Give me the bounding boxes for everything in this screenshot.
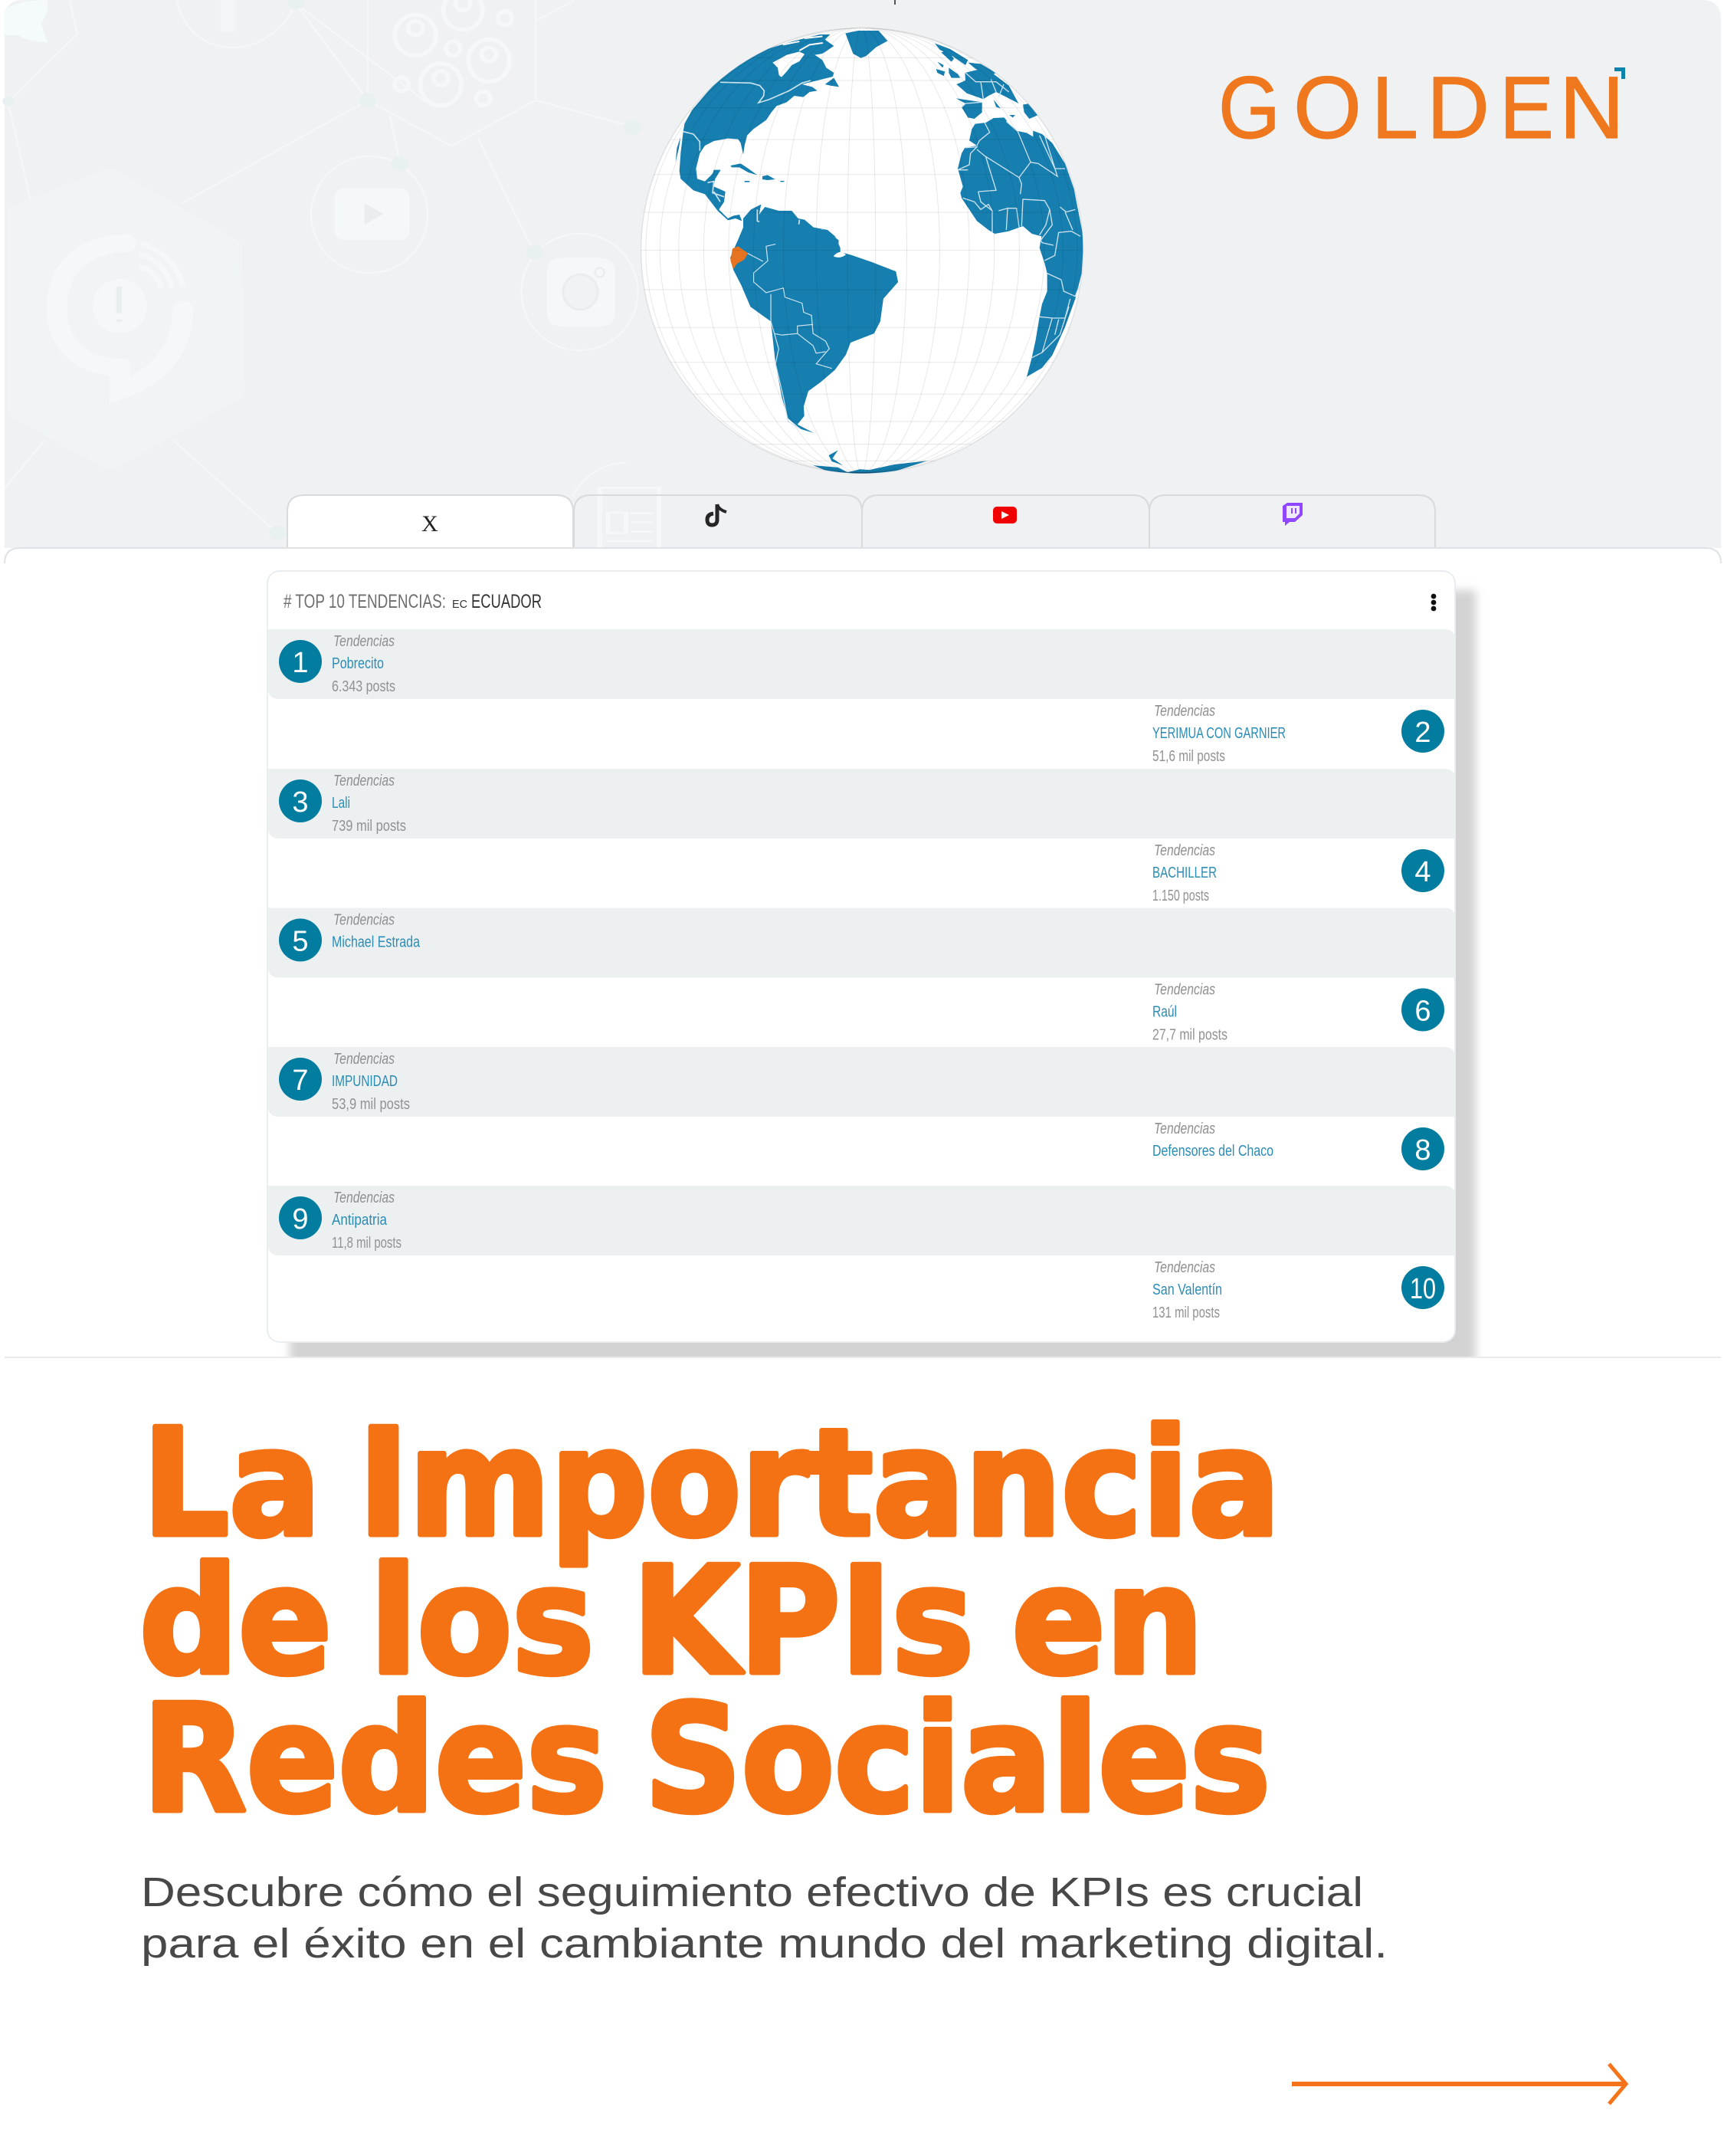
speech bubble icon xyxy=(4,0,48,42)
small tick at top xyxy=(894,0,896,5)
title xyxy=(139,1397,1280,1846)
faint instagram icon xyxy=(547,258,615,327)
trend row 10: 10 xyxy=(1410,1273,1436,1305)
menu dots xyxy=(1431,594,1436,611)
subtitle xyxy=(141,1869,1388,1967)
trend row 3: 739 mil posts xyxy=(332,818,406,835)
trend row 3: 3 xyxy=(292,786,309,819)
Ecuador highlight xyxy=(730,246,748,269)
trend row 4 xyxy=(1152,842,1444,904)
trend row 6: 6 xyxy=(1414,995,1431,1027)
trend row 2: YERIMUA CON GARNIER xyxy=(1152,725,1286,742)
title: de los KPIs en xyxy=(139,1535,1204,1708)
trend row 1: Tendencias xyxy=(333,633,395,650)
trend row 7 xyxy=(268,1047,1455,1117)
trend row 4: 4 xyxy=(1414,856,1431,888)
logo: GOLDEN: G xyxy=(1218,59,1280,157)
card header: EC xyxy=(452,598,467,611)
trend row 8: 8 xyxy=(1414,1134,1431,1167)
trend row 1: 6.343 posts xyxy=(332,678,395,695)
trend row 6: 27,7 mil posts xyxy=(1152,1027,1227,1044)
trend row 8: Defensores del Chaco xyxy=(1152,1143,1273,1160)
faint video icon xyxy=(335,189,410,240)
tab: X xyxy=(287,495,573,548)
trend row 4: Tendencias xyxy=(1154,842,1215,859)
trend row 2: Tendencias xyxy=(1154,703,1215,720)
trend row 2: 2 xyxy=(1414,717,1431,749)
trend row 8: Tendencias xyxy=(1154,1121,1215,1137)
tab: YouTube xyxy=(862,495,1149,548)
Hudson Bay xyxy=(772,51,805,77)
card header: # TOP 10 TENDENCIAS: xyxy=(284,591,446,612)
trend row 1 xyxy=(268,629,1455,699)
trend row 10: Tendencias xyxy=(1154,1259,1215,1276)
trend row 2 xyxy=(1152,703,1444,765)
subtitle: Descubre cómo el seguimiento efectivo de KPIs es crucial xyxy=(141,1869,1363,1915)
trend row 5: 5 xyxy=(292,926,309,958)
title: Redes Sociales xyxy=(143,1673,1270,1846)
Europe and Africa xyxy=(935,44,1083,377)
trend row 5 xyxy=(268,907,1455,978)
title: La Importancia xyxy=(143,1397,1280,1570)
trend row 7: 53,9 mil posts xyxy=(332,1096,410,1113)
trend row 10 xyxy=(1152,1259,1444,1321)
trend row 4: 1.150 posts xyxy=(1152,888,1209,904)
trend row 2: 51,6 mil posts xyxy=(1152,748,1225,765)
faint people network icon xyxy=(395,0,512,106)
header background panel xyxy=(5,0,1721,548)
logo: GOLDEN: E xyxy=(1499,59,1554,157)
tab: X: X xyxy=(421,511,438,537)
card header: ECUADOR xyxy=(471,591,542,612)
main white panel xyxy=(5,548,1721,1357)
trend row 4: BACHILLER xyxy=(1152,865,1217,881)
logo: GOLDEN: L xyxy=(1372,59,1418,157)
logo: GOLDEN: O xyxy=(1293,59,1362,157)
trend row 9 xyxy=(268,1186,1455,1255)
trend row 10: San Valentín xyxy=(1152,1281,1222,1298)
trend row 7: 7 xyxy=(292,1065,309,1097)
hexagon alert icon xyxy=(8,167,244,471)
faint top bar glyph xyxy=(221,0,236,31)
trend row 7: Tendencias xyxy=(333,1051,395,1068)
trend row 8 xyxy=(1152,1121,1444,1170)
trend row 3: Tendencias xyxy=(333,773,395,789)
tab: TikTok xyxy=(574,495,862,548)
trend row 9: Antipatria xyxy=(332,1212,388,1229)
trend row 1: 1 xyxy=(292,647,309,679)
decorative network background xyxy=(2,0,641,540)
trend row 6 xyxy=(1152,981,1444,1044)
Americas north xyxy=(676,31,887,253)
tab: Twitch xyxy=(1149,495,1435,548)
trend row 6: Raúl xyxy=(1152,1004,1177,1021)
trend row 9: 9 xyxy=(292,1203,309,1236)
globe map xyxy=(641,28,1083,474)
globe sphere xyxy=(641,28,1083,474)
logo: GOLDEN: D xyxy=(1427,59,1490,157)
subtitle: para el éxito en el cambiante mundo del marketing digital. xyxy=(141,1921,1388,1967)
logo: GOLDEN xyxy=(1218,59,1625,157)
arrow xyxy=(1292,2064,1626,2104)
trend row 3 xyxy=(268,769,1455,838)
trend row 5: Michael Estrada xyxy=(332,934,421,950)
card shadow xyxy=(290,590,1476,1364)
trend row 5: Tendencias xyxy=(333,912,395,929)
trend row 1: Pobrecito xyxy=(332,655,384,672)
logo: GOLDEN: N xyxy=(1559,59,1624,157)
trend row 6: Tendencias xyxy=(1154,981,1215,998)
faint news icon behind tabs xyxy=(600,487,659,553)
trend row 10: 131 mil posts xyxy=(1152,1304,1220,1321)
panel: top 10 trends card xyxy=(267,571,1455,1342)
trend row 3: Lali xyxy=(332,795,350,812)
trend row 9: 11,8 mil posts xyxy=(332,1235,402,1252)
trend row 7: IMPUNIDAD xyxy=(332,1073,398,1090)
Americas south xyxy=(730,222,927,474)
trend row 9: Tendencias xyxy=(333,1190,395,1206)
graticule xyxy=(641,28,1083,474)
